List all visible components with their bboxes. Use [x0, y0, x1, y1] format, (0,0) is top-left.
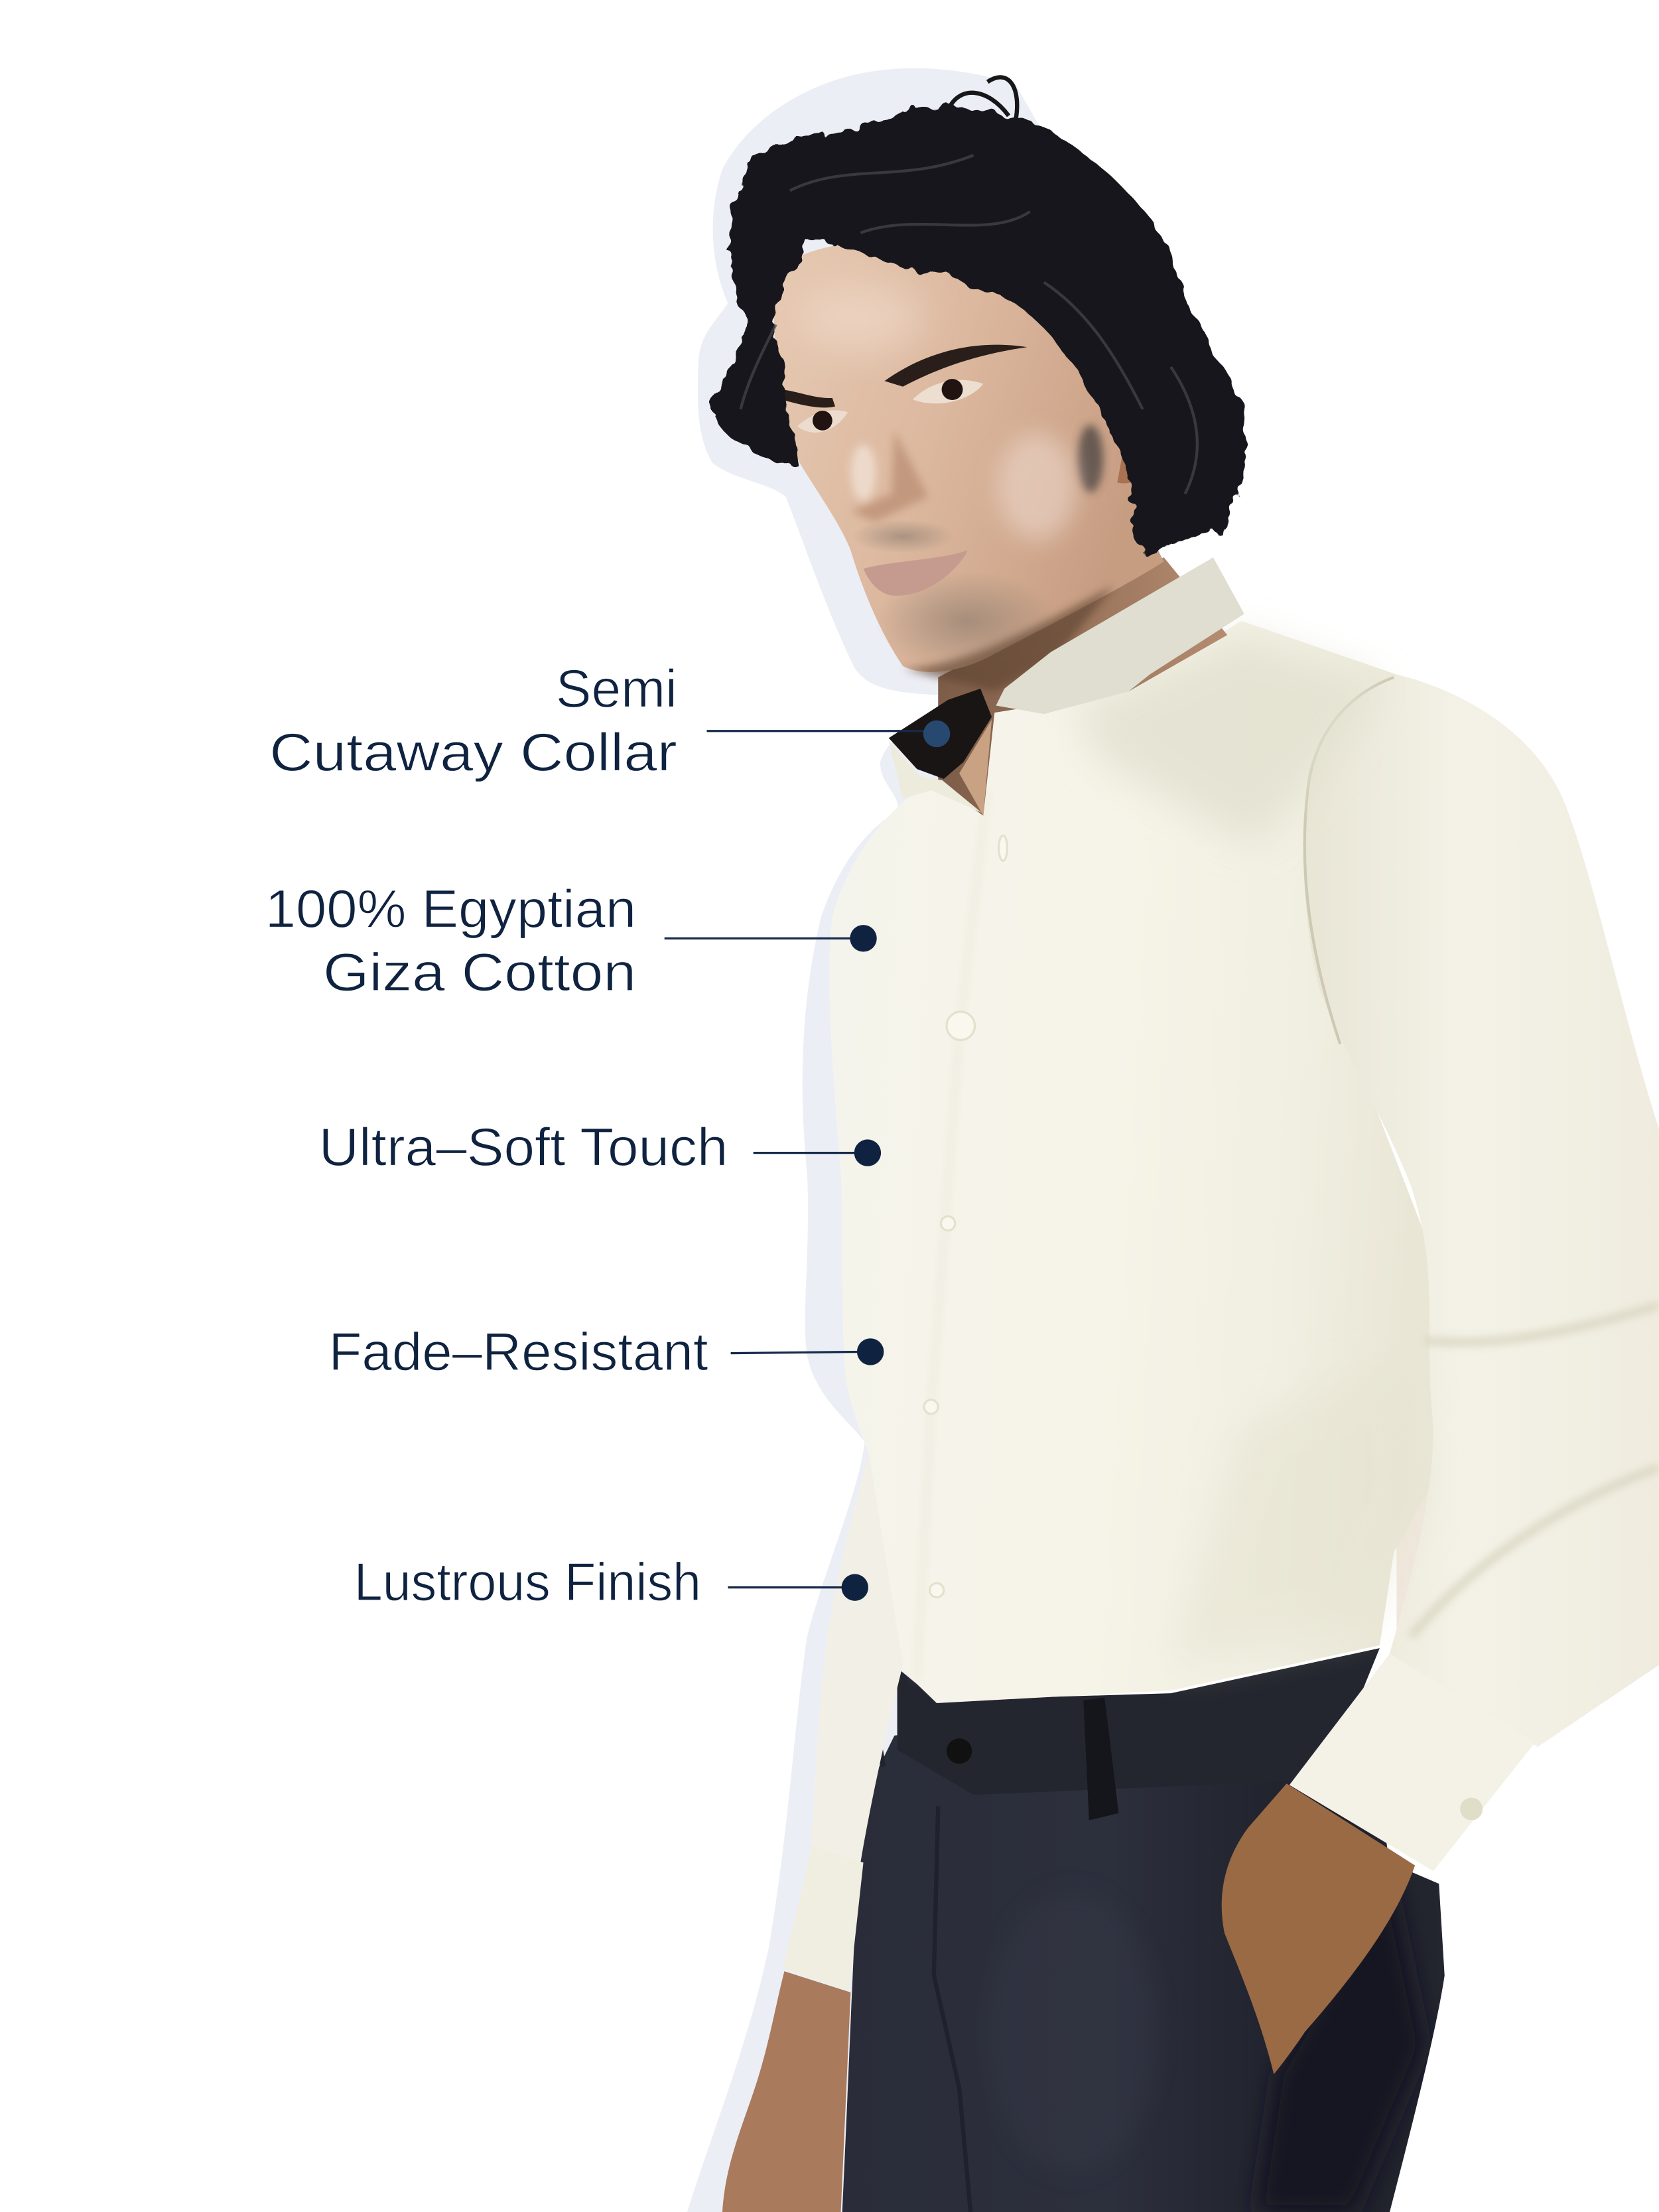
left iris	[813, 411, 832, 431]
shirt yoke shading	[1072, 635, 1382, 847]
left collar flap	[889, 741, 982, 813]
cuff button	[1460, 1798, 1483, 1821]
waistband	[897, 1648, 1380, 1795]
neck shadow	[903, 586, 1114, 691]
label text: Fade–Resistant	[329, 1322, 708, 1382]
right iris	[942, 379, 962, 400]
inner collar band	[889, 689, 992, 779]
shirt side gap	[1396, 1242, 1495, 1651]
marker dot	[842, 1574, 868, 1601]
waistband button	[947, 1738, 972, 1763]
shirt	[783, 621, 1659, 1991]
marker dot	[850, 925, 877, 952]
marker dot	[923, 721, 950, 747]
skin v opening	[959, 720, 992, 815]
shirt body	[829, 621, 1441, 1703]
leader line	[728, 1587, 846, 1588]
leader line	[665, 937, 854, 939]
leader line	[706, 730, 925, 732]
facial features	[779, 345, 1161, 596]
lips	[864, 551, 968, 596]
collar	[889, 557, 1244, 815]
jaw stubble	[875, 571, 1058, 670]
background silhouette halo	[687, 68, 1128, 2212]
moustache	[852, 519, 954, 553]
left cuff	[783, 1846, 864, 1991]
left hand	[722, 1971, 850, 2212]
hair highlights	[741, 155, 1197, 494]
trouser shadow	[1256, 1877, 1425, 2212]
callout: ultra-soft touch	[319, 1118, 881, 1178]
nose highlight	[850, 445, 876, 501]
label text: Semi	[556, 659, 677, 719]
label text: Lustrous Finish	[354, 1553, 701, 1612]
right cuff	[1290, 1654, 1535, 1871]
callout: egyptian giza cotton	[265, 879, 877, 1002]
eyebrows	[779, 345, 1027, 407]
nose shadow	[850, 431, 928, 522]
callout: semi cutaway collar	[269, 659, 950, 782]
left eye white	[797, 410, 848, 433]
right forearm in pocket	[1222, 1783, 1415, 2074]
marker dot	[857, 1338, 884, 1365]
shirt buttons	[924, 835, 1007, 1598]
leader line	[754, 1152, 858, 1154]
shirt left sleeve	[811, 1454, 903, 1862]
trouser sheen	[988, 1891, 1157, 2173]
right eye	[913, 380, 983, 403]
sideburn	[1078, 425, 1103, 492]
hair	[711, 77, 1248, 548]
label text second line: Giza Cotton	[323, 943, 636, 1002]
right sleeve	[1303, 675, 1659, 1747]
callout: fade-resistant	[329, 1322, 884, 1382]
leader line	[731, 1351, 860, 1353]
callout: lustrous finish	[354, 1553, 868, 1612]
stubble and shading	[797, 282, 1114, 691]
man: trousers	[842, 1648, 1445, 2212]
label text: 100% Egyptian	[265, 879, 636, 939]
neck	[938, 557, 1227, 815]
forehead highlight	[797, 282, 924, 353]
hair mass	[711, 107, 1248, 548]
shirt placket shadow	[917, 790, 988, 1679]
marker dot	[854, 1139, 881, 1166]
shoulder seam	[1305, 677, 1394, 1044]
trouser legs	[842, 1679, 1445, 2212]
right collar leaf	[996, 557, 1244, 714]
label text: Ultra–Soft Touch	[319, 1118, 728, 1178]
trouser crease	[934, 1806, 970, 2212]
label text second line: Cutaway Collar	[269, 723, 677, 782]
hair curl top	[948, 77, 1017, 120]
side belt loop	[875, 1662, 894, 1767]
face	[773, 242, 1164, 672]
cheek highlight	[998, 433, 1077, 541]
ear	[1117, 413, 1161, 484]
shirt body shading	[1171, 1355, 1425, 1665]
right sleeve fold shadow	[1411, 1305, 1659, 1637]
belt loop	[1083, 1698, 1118, 1821]
